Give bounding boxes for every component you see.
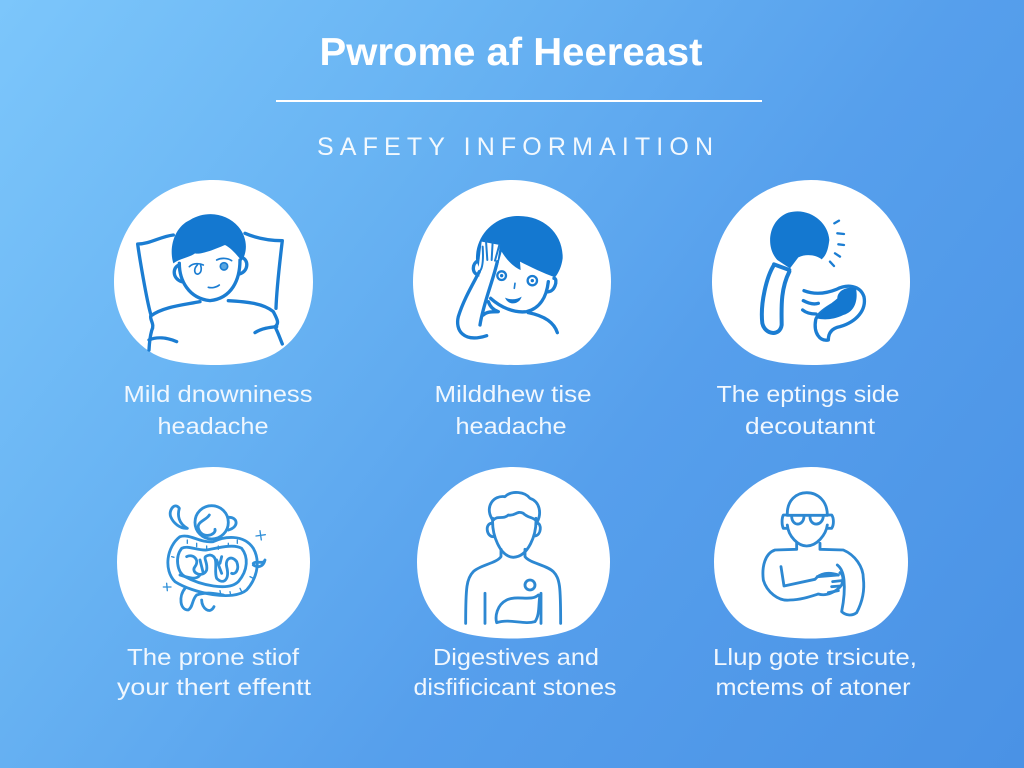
white blob <box>417 467 610 638</box>
label <box>414 644 616 700</box>
label: headache <box>158 413 268 439</box>
label: decoutannt <box>745 413 876 439</box>
label: Milddhew tise <box>434 381 592 407</box>
label: your thert effentt <box>117 674 312 700</box>
label: Llup gote trsicute, <box>713 644 917 670</box>
label: Digestives and <box>433 644 599 670</box>
icon: intestines <box>163 506 265 610</box>
label: The prone stiof <box>127 644 300 670</box>
icon: person lying on pillow <box>138 214 282 350</box>
label: The eptings side <box>716 381 900 407</box>
label: mctems of atoner <box>716 674 911 700</box>
label <box>434 381 592 439</box>
label <box>117 644 312 700</box>
panel: headache <box>413 180 611 439</box>
white blob <box>114 180 313 365</box>
icon: person with glasses holding arm <box>763 493 864 615</box>
panel: intestines <box>117 467 312 700</box>
white blob <box>712 180 910 365</box>
panel: stomach upset <box>712 180 910 439</box>
panel: mild drowsiness <box>114 180 313 439</box>
panel: chest / arm <box>713 467 917 700</box>
icon: head and stomach <box>762 211 864 340</box>
label <box>716 381 900 439</box>
label <box>713 644 917 700</box>
white blob <box>714 467 908 638</box>
label: disfificicant stones <box>414 674 616 700</box>
white blob <box>413 180 611 365</box>
label: Mild dnowniness <box>124 381 312 407</box>
subtitle: SAFETY INFORMAITION <box>317 133 713 161</box>
label <box>124 381 312 439</box>
icon: person holding head <box>458 216 563 338</box>
panel: digestive <box>414 467 616 700</box>
icon: person with stomach <box>466 492 561 623</box>
white blob <box>117 467 310 638</box>
title: Pwrome af Heereast <box>320 31 703 74</box>
label: headache <box>456 413 566 439</box>
